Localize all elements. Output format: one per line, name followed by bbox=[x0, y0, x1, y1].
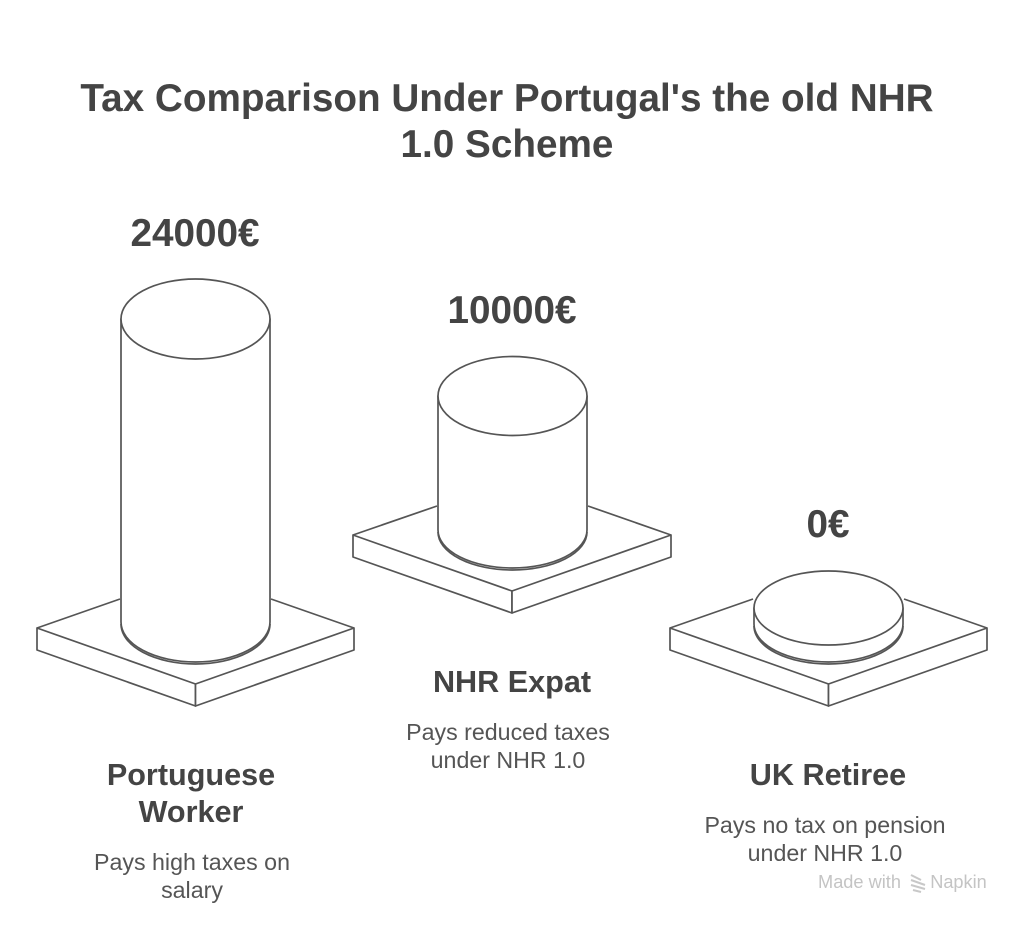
column: UK Retiree bbox=[670, 503, 987, 866]
cylinder bar: UK Retiree bbox=[754, 571, 903, 664]
cylinder bar: Portuguese Worker bbox=[121, 279, 270, 664]
description: UK Retiree: under NHR 1.0 bbox=[748, 840, 902, 866]
column: Portuguese Worker bbox=[37, 212, 354, 903]
label: UK Retiree: UK Retiree bbox=[750, 758, 906, 792]
label: Portuguese Worker: Worker bbox=[139, 795, 244, 829]
description: NHR Expat: under NHR 1.0 bbox=[431, 747, 585, 773]
title: 1.0 Scheme bbox=[401, 123, 613, 166]
description: Portuguese Worker bbox=[94, 849, 290, 903]
description: Portuguese Worker: salary bbox=[161, 877, 223, 903]
base platform: UK Retiree bbox=[670, 599, 987, 706]
title: Tax Comparison Under Portugal's the old NHR bbox=[80, 77, 934, 120]
base platform: Portuguese Worker bbox=[37, 599, 354, 706]
label: NHR Expat: NHR Expat bbox=[433, 665, 591, 699]
base platform: NHR Expat bbox=[353, 506, 671, 613]
value: 24000€: 24000€ bbox=[130, 212, 260, 255]
description: UK Retiree: Pays no tax on pension bbox=[704, 812, 946, 838]
column: NHR Expat bbox=[353, 289, 671, 773]
icon: Napkin logo bbox=[911, 875, 925, 892]
label: Portuguese Worker: Portuguese bbox=[107, 758, 275, 792]
watermark: Made with Napkin: Napkin bbox=[930, 872, 987, 892]
description: NHR Expat bbox=[406, 719, 610, 773]
cylinder bar: NHR Expat bbox=[438, 356, 587, 570]
value: 10000€: 10000€ bbox=[447, 289, 577, 332]
description: NHR Expat: Pays reduced taxes bbox=[406, 719, 610, 745]
description: UK Retiree bbox=[704, 812, 946, 866]
title bbox=[80, 77, 934, 166]
description: Portuguese Worker: Pays high taxes on bbox=[94, 849, 290, 875]
watermark: Made with Napkin bbox=[818, 872, 987, 892]
value: 0€: 0€ bbox=[806, 503, 850, 546]
watermark: Made with Napkin: Made with bbox=[818, 872, 901, 892]
label: Portuguese Worker bbox=[107, 758, 275, 829]
